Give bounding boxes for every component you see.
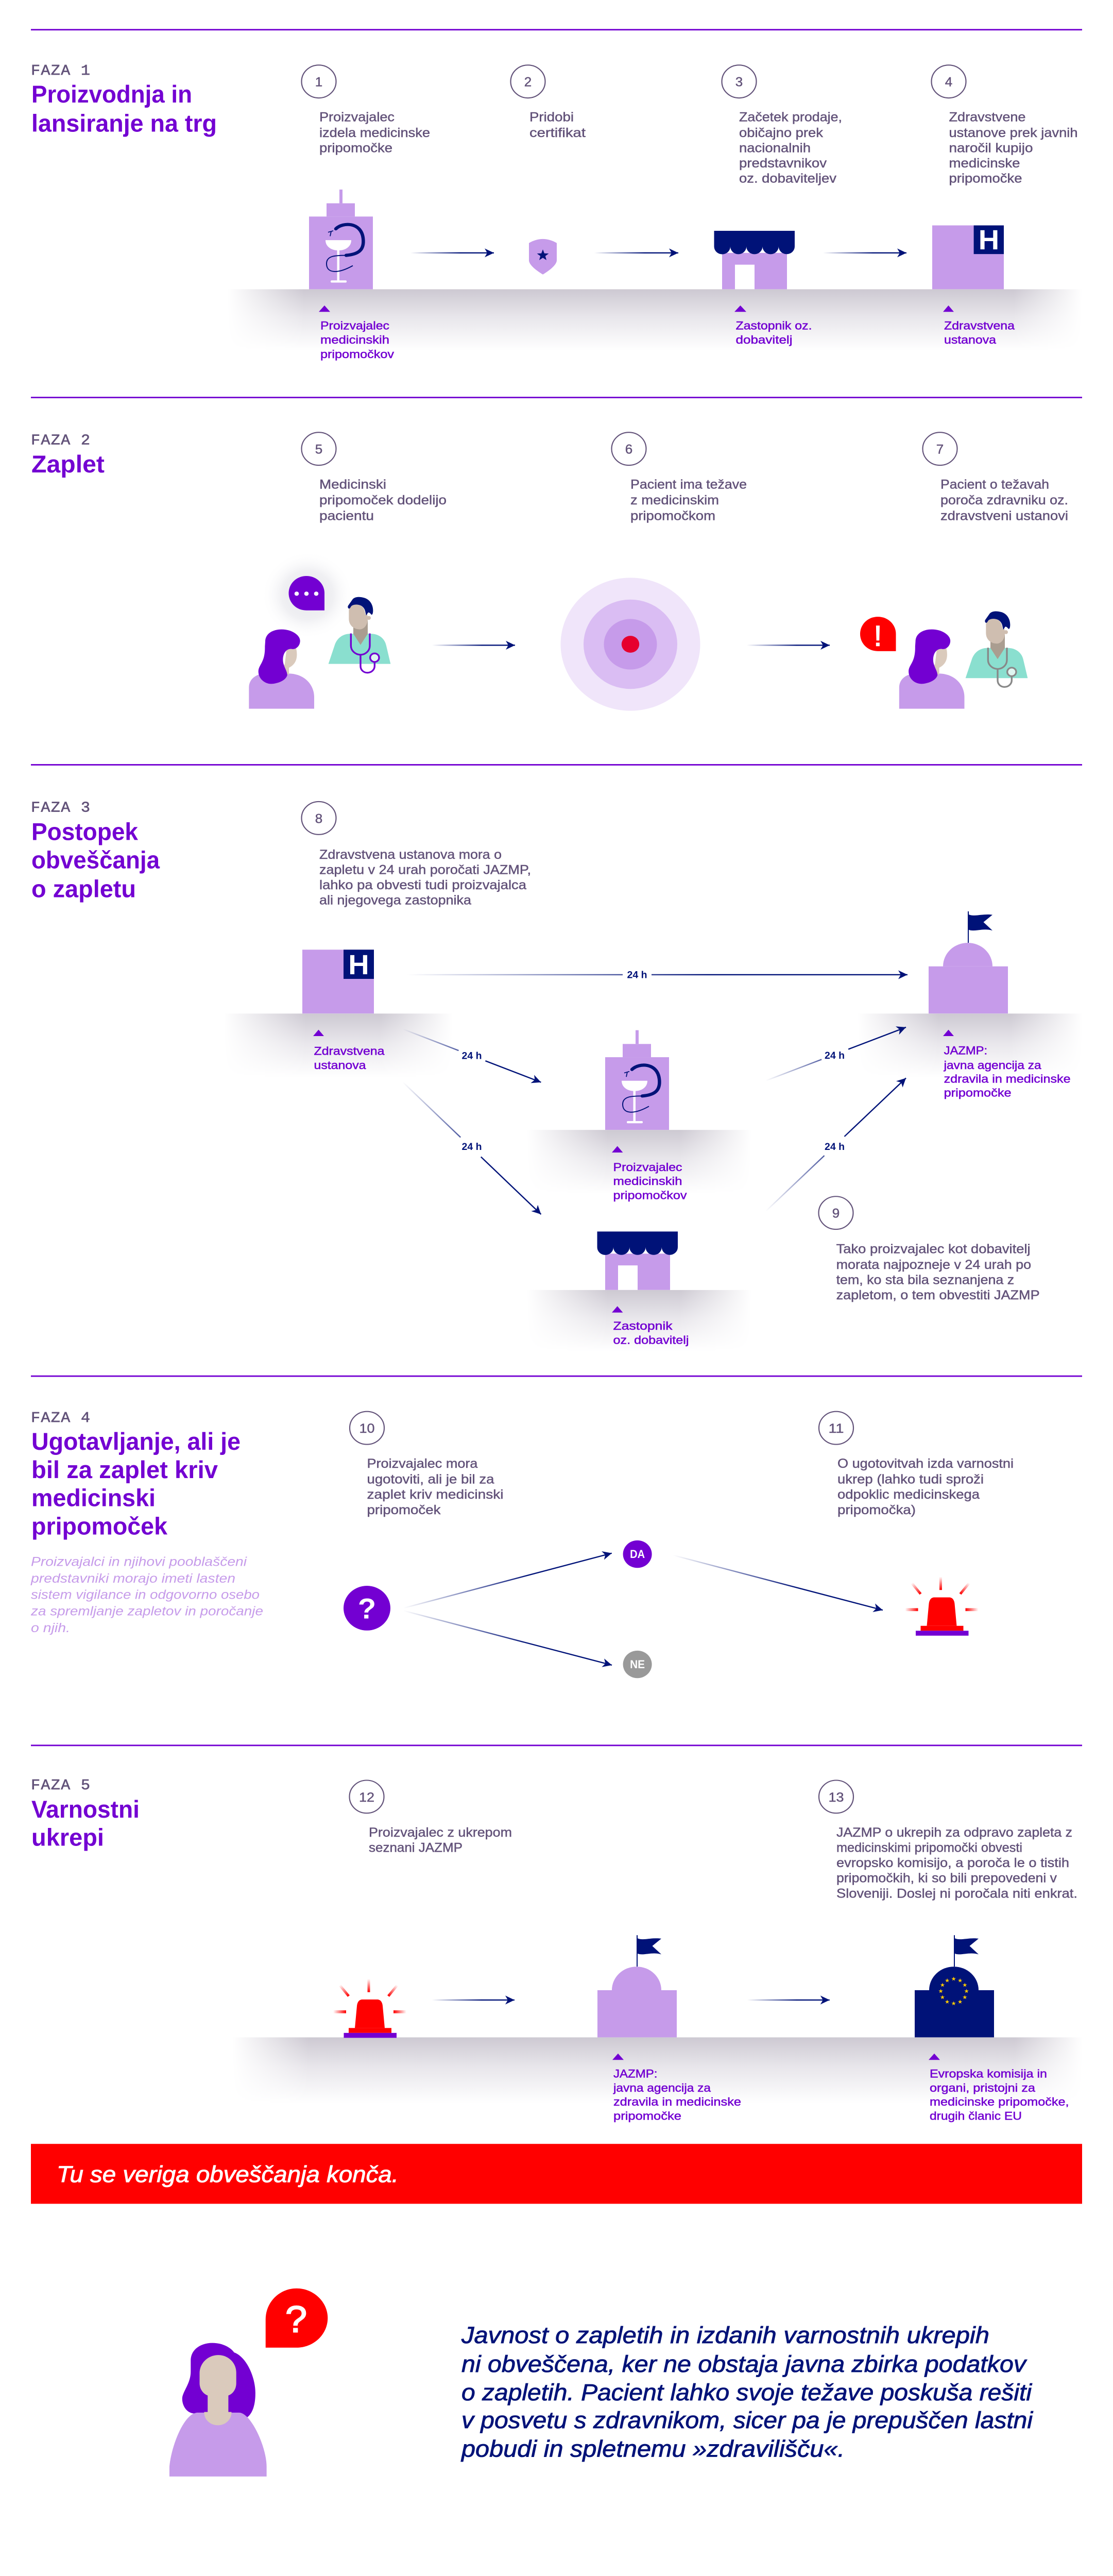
heading: Proizvodnja in lansiranje na trg [31,81,217,137]
italic note: predstavniki morajo imeti lasten [30,1571,235,1586]
italic note: Proizvajalci in njihovi pooblaščeni [31,1555,248,1569]
step 3: 3 [735,75,743,90]
heading: Varnostni ukrepi: ukrepi [31,1824,104,1851]
step 4 [931,65,1077,185]
step 5 [302,432,447,523]
heading: Ugotavljanje, ali je bil za zaplet kriv medicinski pripomoček: bil za zaplet kriv [31,1456,218,1484]
step 1: pripomočke [319,141,392,155]
step 7: zdravstveni ustanovi [940,509,1068,523]
step 13 [819,1780,1077,1901]
step 6: 6 [625,443,632,457]
label: JAZMP: javna agencija za [944,1059,1041,1072]
label: JAZMP: zdravila in medicinske [613,2095,741,2108]
icon: hospital: H [348,949,369,980]
label: health institution [313,1030,385,1072]
closing statement: v posvetu s zdravnikom, sicer pa je prepuščen lastni [461,2407,1034,2433]
step 9: Tako proizvajalec kot dobavitelj [836,1242,1031,1256]
label: distributor: Zastopnik oz. [735,319,812,332]
label: European Commission: medicinske pripomočke, [930,2095,1069,2108]
icon: target with problem spot [560,578,700,711]
label: European Commission: organi, pristojni za [930,2082,1036,2094]
phase label: Faza 2: FAZA 2 [31,432,90,449]
step 8: zapletu v 24 urah poročati JAZMP, [319,863,531,877]
heading: Varnostni ukrepi [31,1796,140,1851]
arrow: hospital to JAZMP, 24 h: 24 h [627,970,647,980]
ground shadow [239,290,1071,340]
label: manufacturer: pripomočkov [613,1189,687,1201]
icon: hospital [302,949,374,1013]
label: JAZMP: JAZMP: [944,1044,987,1057]
illustration: patient and doctor talking [249,551,390,709]
label: JAZMP: pripomočke [944,1087,1012,1099]
icon: distributor shop [714,231,795,289]
step 7 [923,432,1068,523]
icon: question circle [344,1586,390,1631]
step 10: pripomoček [367,1503,441,1517]
step 7: 7 [936,443,944,457]
label: JAZMP: JAZMP: [613,2067,658,2080]
step 12: Proizvajalec z ukrepom [369,1826,512,1840]
step 2: certifikat [529,126,586,140]
step 11: pripomočka) [837,1503,916,1517]
label: European Commission [929,2054,1069,2122]
step 10: Proizvajalec mora [367,1456,478,1471]
arrow: certificate to distributor [594,248,678,257]
step 3 [722,65,842,185]
badge: NE [623,1651,652,1678]
step 10 [350,1412,504,1517]
phase label: Faza 1: FAZA 1 [31,62,90,79]
icon: alarm siren [333,1979,406,2038]
arrow: siren to JAZMP [432,1995,515,2005]
label: European Commission: Evropska komisija in [930,2067,1047,2080]
arrow: hospital to distributor, 24 h [400,1079,544,1217]
step 4: Zdravstvene [949,110,1025,124]
step 5: pacientu [319,509,374,523]
heading: Postopek obveščanja o zapletu: Postopek [31,818,139,845]
phase label: Faza 3: FAZA 3 [31,800,90,816]
step 8: 8 [315,812,322,826]
heading: Postopek obveščanja o zapletu [31,818,160,903]
label: health institution: ustanova [944,334,997,346]
illustration: patient reporting to doctor: ! [874,621,882,652]
step 9 [819,1196,1040,1302]
step 8 [302,802,531,907]
label: health institution: Zdravstvena [314,1045,385,1057]
arrow: distributor to JAZMP, 24 h [762,1075,909,1214]
closing statement [460,2322,1034,2462]
step 4: naročil kupijo [949,141,1033,155]
label: manufacturer [612,1146,687,1201]
step 6: pripomočkom [630,509,715,523]
closing statement: Javnost o zapletih in izdanih varnostnih ukrepih [461,2322,989,2348]
badge: NE: NE [630,1658,645,1671]
icon: JAZMP building [929,911,1008,1013]
step 2 [511,65,586,140]
label: manufacturer [319,306,395,361]
arrow: manufacturer to JAZMP, 24 h [764,1023,907,1085]
step 6: z medicinskim [630,493,719,507]
step 5: pripomoček dodelijo [319,493,447,507]
arrow: hospital to JAZMP, 24 h [407,970,907,980]
icon: European Commission building [915,1935,994,2037]
arrow: distributor to JAZMP, 24 h: 24 h [825,1142,845,1153]
step 9: tem, ko sta bila seznanjena z [836,1273,1014,1287]
label: distributor: dobavitelj [735,334,792,346]
label: distributor [612,1306,689,1347]
step 12 [349,1780,512,1855]
italic note [30,1555,263,1635]
illustration: confused patient with question bubble: ? [285,2298,307,2340]
label: JAZMP: zdravila in medicinske [944,1073,1071,1085]
step 7: poroča zdravniku oz. [940,493,1068,507]
heading: Postopek obveščanja o zapletu: o zapletu [31,875,136,903]
arrow: JAZMP to European Commission [747,1995,830,2005]
ground shadow: JAZMP [870,1013,1071,1065]
step 7: Pacient o težavah [940,478,1049,492]
closing statement: pobudi in spletnemu »zdravilišču«. [460,2435,845,2462]
heading: Ugotavljanje, ali je bil za zaplet kriv medicinski pripomoček: medicinski [31,1485,156,1512]
label: JAZMP: javna agencija za [613,2082,711,2094]
step 11 [819,1412,1014,1517]
illustration: patient reporting to doctor [860,611,1028,709]
ground shadow: manufacturer [540,1130,740,1182]
ground shadow: hospital [236,1013,441,1065]
step 13: Sloveniji. Doslej ni poročala niti enkrat. [836,1887,1077,1901]
step 3: nacionalnih [739,141,811,155]
label: JAZMP: pripomočke [613,2110,681,2122]
step 4: pripomočke [949,172,1022,185]
italic note: o njih. [31,1621,70,1635]
arrow: hospital to distributor, 24 h: 24 h [461,1142,482,1153]
label: distributor: Zastopnik [613,1319,673,1332]
step 11: ukrep (lahko tudi sproži [837,1472,984,1486]
label: manufacturer: Proizvajalec [613,1161,682,1174]
heading: Varnostni ukrepi: Varnostni [31,1796,140,1823]
step 4: medicinske [949,157,1020,171]
step 11: odpoklic medicinskega [837,1487,980,1502]
arrow: distributor to hospital [823,248,906,257]
step 13: 13 [828,1790,844,1805]
label: manufacturer: pripomočkov [320,348,395,361]
closing statement: ni obveščena, ker ne obstaja javna zbirka podatkov [461,2351,1028,2377]
panel: Faza 2 [31,397,1082,711]
step 5: 5 [315,443,322,457]
heading: Postopek obveščanja o zapletu: obveščanja [31,847,160,874]
step 9: morata najpozneje v 24 urah po [836,1258,1031,1272]
icon: JAZMP building [597,1935,677,2037]
step 12: seznani JAZMP [369,1841,463,1855]
label: health institution: ustanova [314,1059,366,1072]
illustration: confused patient with question bubble [169,2289,328,2477]
step 4: 4 [945,75,952,90]
heading: Ugotavljanje, ali je bil za zaplet kriv medicinski pripomoček [31,1428,241,1540]
label: distributor [734,306,812,346]
panel: Faza 3 [31,764,1083,1351]
icon: certificate shield [529,239,557,275]
ground shadow: distributor [540,1290,740,1341]
panel: Faza 1 [31,29,1082,361]
callout: end of notification chain [31,2144,1082,2204]
icon: manufacturer building [605,1030,669,1130]
step 10: zaplet kriv medicinski [367,1487,503,1502]
phase label: Faza 4: FAZA 4 [31,1410,90,1427]
step 13: medicinskimi pripomočki obvesti [836,1841,1022,1855]
italic note: sistem vigilance in odgovorno osebo [31,1588,260,1602]
icon: hospital [932,224,1004,289]
label: manufacturer: medicinskih [320,334,389,346]
heading: Proizvodnja in lansiranje na trg: Proizvodnja in [31,81,192,108]
arrow: talk to target [432,641,515,650]
step 6: Pacient ima težave [630,478,747,492]
step 8: Zdravstvena ustanova mora o [319,848,502,862]
heading: Zaplet: Zaplet [31,451,105,478]
step 8: lahko pa obvesti tudi proizvajalca [319,878,527,892]
arrow: hospital to manufacturer, 24 h: 24 h [461,1050,482,1061]
badge: DA: DA [630,1548,645,1561]
panel: Faza 4 [30,1376,1082,1678]
heading: Proizvodnja in lansiranje na trg: lansiranje na trg [31,110,217,137]
step 2: Pridobi [529,110,574,124]
step 9: zapletom, o tem obvestiti JAZMP [836,1288,1040,1302]
callout: end of notification chain: Tu se veriga obveščanja konča. [57,2161,399,2187]
step 3: Začetek prodaje, [739,110,842,124]
icon: distributor shop [597,1231,678,1290]
label: JAZMP [943,1030,1071,1099]
icon: alarm siren [905,1577,979,1636]
arrow: hospital to manufacturer, 24 h [401,1025,543,1087]
step 2: 2 [524,75,532,90]
italic note: za spremljanje zapletov in poročanje [30,1604,263,1619]
arrow: question to no [402,1606,613,1669]
arrow: yes to safety measure [672,1551,884,1615]
label: European Commission: drugih članic EU [930,2110,1022,2122]
arrow: target to report [747,641,830,650]
step 1: 1 [315,75,322,90]
step 10: 10 [359,1422,374,1436]
icon: question circle: ? [358,1594,376,1625]
panel: Faza 5 [31,1744,1083,2122]
step 1: Proizvajalec [319,110,395,124]
step 3: običajno prek [739,126,823,140]
step 1: izdela medicinske [319,126,430,140]
step 4: ustanove prek javnih [949,126,1077,140]
label: JAZMP [612,2054,741,2122]
step 3: oz. dobaviteljev [739,172,836,185]
step 13: pripomočkih, ki so bili prepovedeni v [836,1871,1057,1886]
arrow: manufacturer to JAZMP, 24 h: 24 h [825,1050,845,1061]
step 5: Medicinski [319,478,386,492]
step 6 [612,432,747,523]
arrow: question to yes [402,1549,613,1613]
label: manufacturer: medicinskih [613,1175,682,1188]
step 3: predstavnikov [739,157,827,171]
closing statement: o zapletih. Pacient lahko svoje težave poskuša rešiti [461,2379,1033,2405]
step 9: 9 [832,1207,840,1221]
step 13: evropsko komisijo, a poroča le o tistih [836,1856,1069,1870]
heading: Ugotavljanje, ali je bil za zaplet kriv medicinski pripomoček: Ugotavljanje, ali je [31,1428,241,1455]
step 10: ugotoviti, ali je bil za [367,1472,494,1486]
step 13: JAZMP o ukrepih za odpravo zapleta z [836,1826,1072,1840]
step 11: O ugotovitvah izda varnostni [837,1456,1014,1471]
icon: manufacturer building [309,190,373,289]
step 8: ali njegovega zastopnika [319,893,472,907]
label: health institution: Zdravstvena [944,319,1015,332]
step 1 [302,65,430,155]
arrow: manufacturer to certificate [410,248,494,257]
icon: hospital: H [979,224,999,256]
ground shadow [244,2037,1072,2092]
label: health institution [943,306,1015,346]
phase label: Faza 5: FAZA 5 [31,1777,90,1794]
step 11: 11 [828,1422,844,1436]
heading: Ugotavljanje, ali je bil za zaplet kriv medicinski pripomoček: pripomoček [31,1513,168,1540]
label: manufacturer: Proizvajalec [320,319,389,332]
step 12: 12 [359,1790,374,1805]
label: distributor: oz. dobavitelj [613,1334,689,1347]
badge: DA [623,1540,652,1568]
